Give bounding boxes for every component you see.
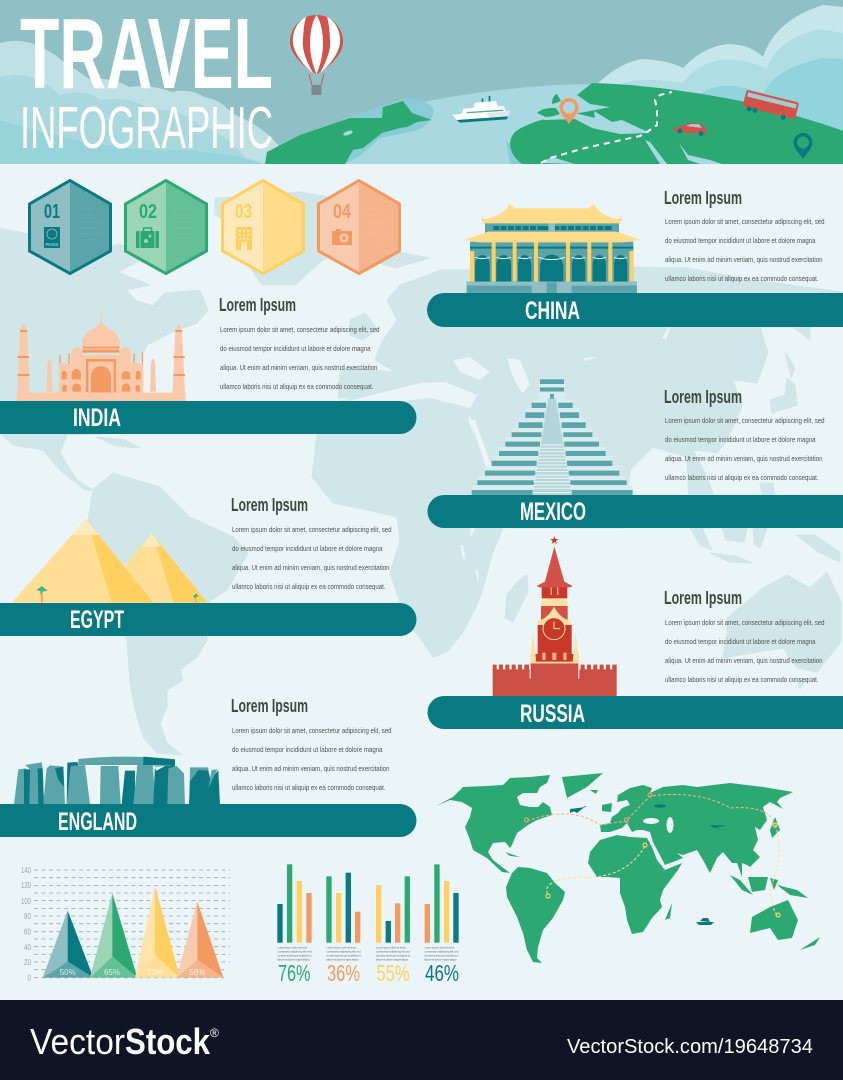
captions: Lorem ipsum dolor sit amet, [326, 946, 357, 950]
heading: Lorem Ipsum [219, 295, 296, 315]
title: TRAVEL [20, 0, 273, 110]
captions: labore et dolore magna aliqua [278, 958, 310, 962]
axis labels: 120 [21, 880, 31, 890]
captions: consectetur adipiscing elit, sed [278, 950, 312, 954]
body text: ullamco laboris nisi ut aliquip ex ea commodo consequat. [665, 473, 818, 482]
icon: pin teal [794, 133, 812, 159]
label: RUSSIA [520, 700, 585, 728]
hexagon 04: 04 [333, 201, 352, 223]
bars group 46% [425, 864, 459, 943]
body text: do eiusmod tempor incididunt ut labore et dolore magna [232, 745, 382, 754]
hexagon text: sit amet, consectetur [365, 213, 386, 217]
hexagon text: eiusmod tempor [269, 226, 290, 230]
triangle values: 72% [147, 968, 163, 977]
body text: aliqua. Ut enim ad minim veniam, quis nostrud exercitation [220, 363, 378, 372]
hexagon text: eiusmod tempor [172, 226, 193, 230]
image reference: VectorStock.com/19648734 [567, 1036, 813, 1058]
hexagon text: Lorem ipsum dolor [269, 207, 286, 211]
label: CHINA [525, 297, 580, 325]
captions: labore et dolore magna aliqua [424, 958, 457, 962]
label: INDIA [73, 404, 121, 432]
body text: aliqua. Ut enim ad minim veniam, quis nostrud exercitation [232, 563, 390, 572]
hexagon text: dolore magna [269, 238, 289, 242]
subtitle: INFOGRAPHIC [20, 95, 273, 161]
body text [220, 325, 380, 391]
hexagon text [172, 207, 196, 242]
triangle values: 50% [60, 968, 76, 977]
body text [665, 618, 824, 684]
hexagon text [269, 207, 293, 242]
banner [0, 401, 416, 434]
hexagon text: adipiscing elit, sed do [365, 220, 389, 224]
bars group 36% [326, 873, 360, 943]
banner [427, 293, 843, 327]
banner [0, 804, 416, 837]
captions: consectetur adipiscing elit, sed [424, 950, 459, 954]
hexagon text: sit amet, consectetur [172, 213, 193, 217]
clouds right [597, 5, 843, 132]
icon: balloon [290, 15, 343, 95]
world map [436, 773, 820, 963]
body text: ullamco laboris nisi ut aliquip ex ea commodo consequat. [220, 382, 374, 391]
routes [527, 794, 779, 916]
percent values [278, 960, 459, 986]
icon: suitcase [136, 228, 159, 248]
hexagon text: Lorem ipsum dolor [76, 207, 93, 211]
icon: passport: PASS [46, 242, 58, 247]
axis labels: 80 [24, 911, 31, 921]
body text: do eiusmod tempor incididunt ut labore et dolore magna [232, 544, 382, 553]
hexagon text: eiusmod tempor [365, 226, 386, 230]
hexagon text: adipiscing elit, sed do [172, 220, 196, 224]
hexagon text: dolore magna [172, 238, 192, 242]
panel: India [0, 295, 416, 434]
icon: pin orange [560, 98, 578, 124]
hexagon text: incididunt ut labore et [172, 232, 196, 236]
hexagon text: sit amet, consectetur [76, 213, 97, 217]
label: EGYPT [70, 606, 124, 634]
percent values: 76% [278, 960, 311, 986]
bars group 55% [376, 876, 410, 943]
dashed route [541, 92, 672, 163]
globe [262, 84, 843, 164]
continents [436, 773, 820, 963]
triangle 72% [135, 886, 180, 978]
body text [232, 726, 392, 792]
captions: do eiusmod tempor incididunt ut [278, 954, 312, 958]
captions: consectetur adipiscing elit, sed [326, 950, 361, 954]
axis labels: 100 [21, 896, 31, 906]
hexagon text: dolore magna [76, 238, 96, 242]
illustration: pyramids [12, 519, 207, 603]
banner [428, 696, 843, 729]
hexagon text: incididunt ut labore et [365, 232, 389, 236]
triangle values: 56% [189, 968, 205, 977]
hexagon 01 [30, 180, 110, 274]
captions: Lorem ipsum dolor sit amet, [424, 946, 455, 950]
hexagon text: incididunt ut labore et [76, 232, 100, 236]
panel: Mexico [428, 379, 843, 528]
percent values: 55% [376, 960, 410, 986]
body text [232, 525, 392, 591]
body text: Lorem ipsum dolor sit amet, consectetur adipiscing elit, sed [232, 525, 392, 534]
body text: do eiusmod tempor incididunt ut labore et dolore magna [220, 344, 370, 353]
bar charts [277, 864, 459, 986]
icon: ship [452, 96, 510, 123]
label: MEXICO [520, 498, 586, 526]
route pins [524, 793, 780, 917]
illustration: palace [463, 204, 641, 293]
body text [665, 217, 824, 283]
body text: ullamco laboris nisi ut aliquip ex ea commodo consequat. [232, 582, 386, 591]
heading: Lorem Ipsum [664, 188, 742, 208]
heading: Lorem Ipsum [231, 495, 308, 515]
panel: England [0, 696, 416, 837]
hexagon text: Lorem ipsum dolor [365, 207, 382, 211]
map seas [345, 327, 670, 582]
icon: bus [742, 90, 799, 123]
triangle values [60, 968, 205, 977]
water strips [540, 111, 722, 164]
hexagon 02 [126, 180, 206, 274]
axis labels: 140 [21, 865, 31, 875]
hexagon 03: 03 [235, 201, 252, 223]
banner [428, 495, 843, 528]
hexagon text: adipiscing elit, sed do [269, 220, 293, 224]
captions: Lorem ipsum dolor sit amet, [278, 946, 308, 950]
body text: aliqua. Ut enim ad minim veniam, quis nostrud exercitation [232, 764, 390, 773]
body text: ullamco laboris nisi ut aliquip ex ea commodo consequat. [665, 675, 818, 684]
captions: do eiusmod tempor incididunt ut [424, 954, 459, 958]
body text: Lorem ipsum dolor sit amet, consectetur adipiscing elit, sed [220, 325, 380, 334]
panel: Russia [428, 536, 843, 729]
hexagon 02: 02 [139, 201, 157, 223]
hexagon text: adipiscing elit, sed do [76, 220, 100, 224]
clouds left [0, 41, 280, 164]
hexagon 03 [222, 180, 304, 274]
body text: do eiusmod tempor incididunt ut labore et dolore magna [665, 435, 816, 444]
triangle 65% [90, 893, 137, 978]
captions: do eiusmod tempor incididunt ut [326, 954, 361, 958]
heading: Lorem Ipsum [664, 387, 742, 407]
icon: car [673, 123, 707, 136]
hexagon text: incididunt ut labore et [269, 232, 293, 236]
illustration: stonehenge [14, 757, 220, 804]
percent values: 36% [327, 960, 360, 986]
illustration: pyramid [472, 379, 633, 495]
hexagon text: sit amet, consectetur [269, 213, 290, 217]
body text: do eiusmod tempor incididunt ut labore et dolore magna [665, 637, 816, 646]
captions: Lorem ipsum dolor sit amet, [376, 946, 406, 950]
illustration: kremlin tower [493, 536, 617, 697]
land left [265, 101, 432, 164]
body text: ullamco laboris nisi ut aliquip ex ea commodo consequat. [232, 783, 386, 792]
registered mark: ® [210, 1026, 219, 1040]
illustration: taj mahal [17, 313, 186, 401]
land right [510, 83, 843, 164]
triangle 50% [43, 911, 93, 978]
triangle chart [21, 865, 230, 982]
triangle values: 65% [104, 968, 120, 977]
logo: Vector [30, 1021, 125, 1062]
icon: camera [332, 229, 352, 245]
background world map [0, 192, 843, 755]
icon: planes [570, 804, 727, 830]
body text: do eiusmod tempor incididunt ut labore et dolore magna [665, 236, 816, 245]
captions: labore et dolore magna aliqua [376, 958, 408, 962]
hexagon text: Lorem ipsum dolor [172, 207, 189, 211]
heading: Lorem Ipsum [664, 588, 742, 608]
panel: Egypt [0, 495, 416, 636]
hexagon 04 [318, 180, 400, 274]
header banner [0, 0, 843, 164]
inland water [643, 817, 674, 833]
axis labels: 40 [24, 942, 31, 952]
hexagon 01: 01 [44, 201, 60, 223]
banner [0, 603, 416, 636]
label: ENGLAND [58, 808, 137, 836]
captions: do eiusmod tempor incididunt ut [376, 954, 410, 958]
logo bold: Stock [125, 1021, 211, 1062]
body text: ullamco laboris nisi ut aliquip ex ea commodo consequat. [665, 274, 818, 283]
body text [665, 416, 824, 482]
hexagon text [365, 207, 389, 242]
axis labels [21, 865, 31, 982]
bars group 76% [277, 864, 312, 943]
footer [0, 1000, 843, 1080]
body text: Lorem ipsum dolor sit amet, consectetur adipiscing elit, sed [232, 726, 392, 735]
percent values: 46% [425, 960, 459, 986]
land shadow [270, 98, 434, 164]
heading: Lorem Ipsum [231, 696, 308, 716]
captions: consectetur adipiscing elit, sed [376, 950, 410, 954]
triangle 56% [177, 902, 223, 978]
axis labels: 60 [24, 926, 31, 936]
captions: labore et dolore magna aliqua [326, 958, 359, 962]
hexagon text: dolore magna [365, 238, 385, 242]
hexagon text: eiusmod tempor [76, 226, 97, 230]
axis labels: 0 [28, 972, 31, 982]
icon: ship [696, 918, 714, 925]
captions [278, 946, 459, 962]
panel: China [427, 188, 843, 327]
icon: hotel [236, 227, 252, 250]
axis labels: 20 [24, 957, 31, 967]
hexagon text [76, 207, 100, 242]
